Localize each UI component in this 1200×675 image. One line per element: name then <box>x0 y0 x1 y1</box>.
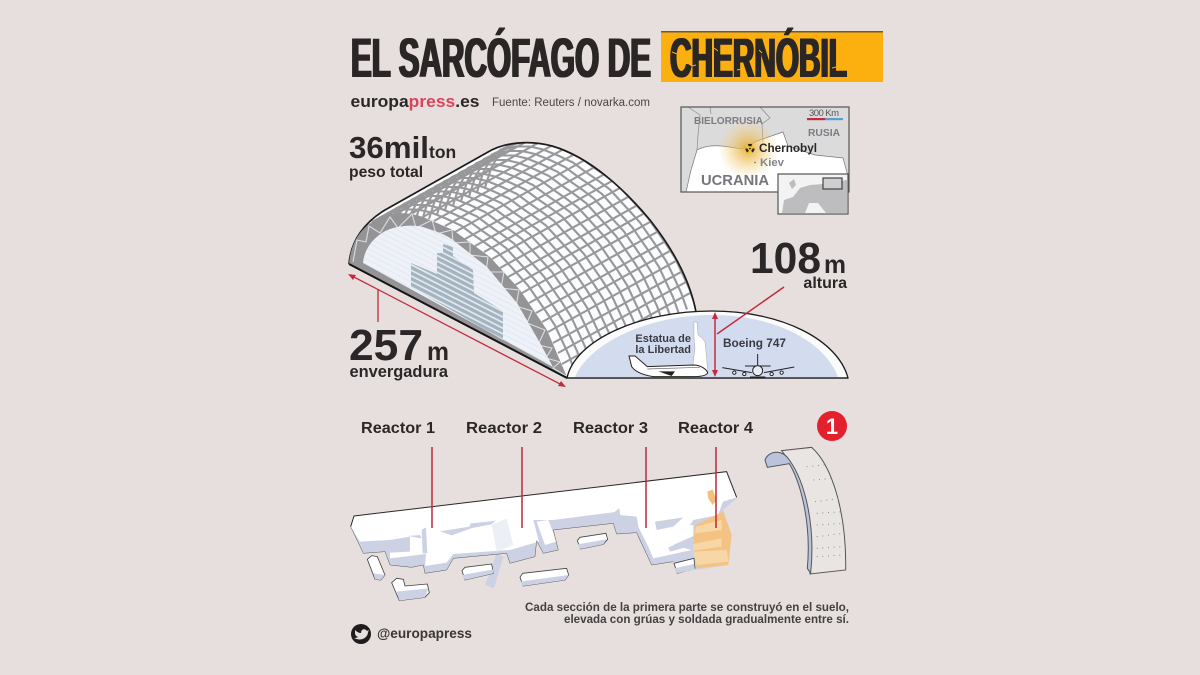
stat: height <box>750 234 847 292</box>
title: EL SARCÓFAGO DE <box>351 26 651 89</box>
stat: total weight: ton <box>429 142 456 162</box>
twitter handle <box>351 624 472 644</box>
icon: front-view plane <box>722 354 794 377</box>
dome base line <box>349 264 567 378</box>
source line: Fuente: Reuters / novarka.com <box>492 97 650 109</box>
locator map <box>681 107 849 214</box>
icon: Statue of Liberty <box>692 322 708 373</box>
label: Statue of Liberty: la Libertad <box>635 344 691 356</box>
side wing roof <box>537 520 557 545</box>
badge: number 1: 1 <box>826 414 838 439</box>
roof back edge <box>351 472 737 527</box>
stat: height: altura <box>803 275 847 292</box>
inset: Europe <box>778 174 848 214</box>
reactor labels: Reactor 2 <box>466 420 542 437</box>
reactor 4 highlight <box>693 489 732 568</box>
reactors 1-2 block roof <box>390 517 539 566</box>
Ukraine area <box>686 132 848 192</box>
stat: span: 257 <box>349 321 423 370</box>
brand: europapress.es: europapress.es <box>350 93 480 111</box>
title highlight: Chernóbil: CHERNÓBIL <box>670 26 847 89</box>
base line <box>567 377 848 379</box>
borders <box>688 107 770 150</box>
twitter handle: @europapress <box>377 626 472 641</box>
label: Boeing 747: Boeing 747 <box>723 338 786 350</box>
height arrow <box>712 287 784 377</box>
truss band <box>349 213 567 377</box>
Chernobyl glow <box>718 119 778 179</box>
icon: side-view plane <box>629 356 708 377</box>
building side faces <box>351 472 737 573</box>
stat: span: m <box>427 338 449 366</box>
reactors 3-4 block roof <box>618 500 723 547</box>
locator map: RUSIA <box>808 127 840 139</box>
stat: total weight <box>349 130 456 181</box>
stat: span <box>349 321 449 381</box>
badge: number 1 <box>817 411 847 441</box>
power plant buildings <box>351 472 737 601</box>
scale bar: 300 Km <box>809 108 839 119</box>
section face <box>782 447 846 574</box>
building lower edge <box>351 523 673 573</box>
section inner strip <box>765 452 812 573</box>
label: Statue of Liberty: Estatua de <box>635 333 691 345</box>
span arrow <box>348 274 566 387</box>
locator map: BIELORRUSIA <box>694 115 763 127</box>
dome shell <box>567 311 848 378</box>
locator map: Kiev <box>760 157 785 169</box>
annex buildings <box>367 533 695 601</box>
reactor labels: Reactor 4 <box>678 420 753 437</box>
truss zigzag <box>353 214 566 376</box>
map frame <box>681 107 849 192</box>
arch section illustration <box>765 447 846 574</box>
caption: elevada con grúas y soldada gradualmente entre sí. <box>564 614 849 626</box>
locator map: Chernobyl <box>759 143 817 155</box>
reactor silhouette inside the dome <box>411 244 503 340</box>
dome roof grid <box>366 144 695 376</box>
icon: radiation <box>746 144 754 153</box>
roof shadow details <box>408 508 688 553</box>
section panel dots <box>807 465 843 557</box>
dome outline <box>349 143 696 312</box>
reactor leader lines <box>432 447 716 528</box>
icon: twitter <box>351 624 371 644</box>
label: Statue of Liberty <box>635 333 691 356</box>
map base <box>681 107 849 192</box>
main dome illustration <box>349 128 717 378</box>
title highlight: Chernóbil <box>661 26 883 89</box>
reactor labels <box>361 420 753 437</box>
stat: total weight: peso total <box>349 164 423 181</box>
stat: height: m <box>824 251 846 279</box>
locator map: UCRANIA <box>701 172 769 189</box>
reactor labels: Reactor 3 <box>573 420 648 437</box>
reactor labels: Reactor 1 <box>361 420 435 437</box>
caption: Cada sección de la primera parte se construyó en el suelo, <box>525 602 849 614</box>
height comparison dome <box>567 311 848 378</box>
annex side faces <box>373 539 695 601</box>
dome front face <box>363 226 553 367</box>
stat: span: envergadura <box>350 363 449 381</box>
long block roof <box>351 472 737 542</box>
caption <box>525 602 849 626</box>
stat: height: 108 <box>750 234 821 283</box>
stat: total weight: 36mil <box>349 130 429 165</box>
dome interior <box>575 315 838 377</box>
